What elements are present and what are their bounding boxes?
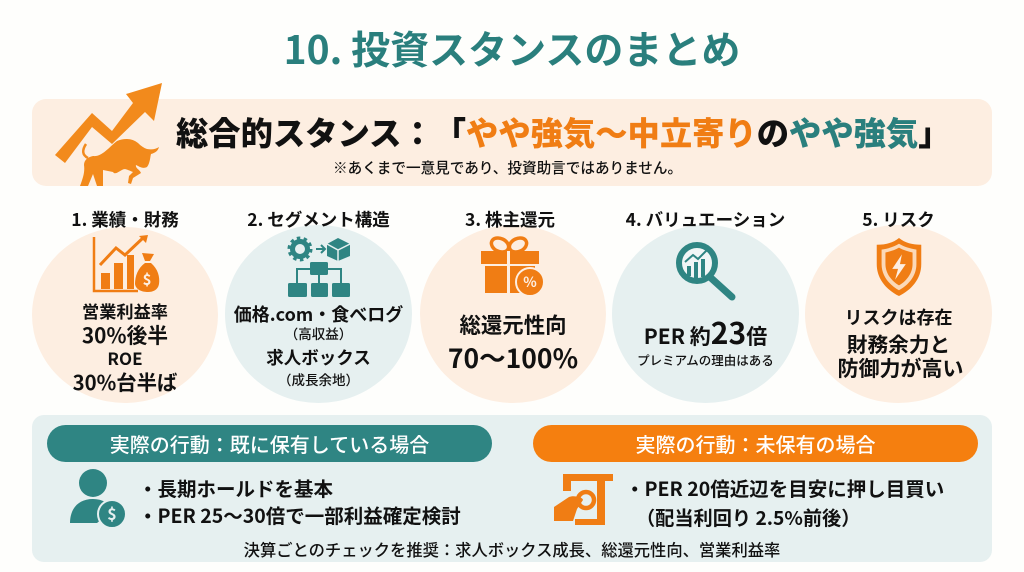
icon: investor with dollar (70, 469, 125, 527)
risk text: リスクは存在 (844, 304, 952, 330)
title: 10. 投資スタンスのまとめ (284, 20, 740, 76)
heading: 3. 株主還元 (465, 207, 555, 232)
action pill: not holding: 実際の行動：未保有の場合 (636, 429, 876, 458)
payout text: 総還元性向 (460, 309, 566, 340)
valuation text: プレミアムの理由はある (637, 350, 774, 369)
panel: 3 shareholder returns (420, 207, 606, 403)
segment text: 求人ボックス (266, 345, 371, 370)
metrics text: 30%後半 (82, 319, 168, 349)
panel: actions (32, 415, 992, 562)
not holding bullet list: （配当利回り 2.5%前後） (636, 503, 860, 531)
payout text (448, 309, 578, 376)
metrics text: 営業利益率 (82, 298, 168, 323)
panel: 5 risk (805, 207, 992, 403)
heading: 5. リスク (862, 207, 935, 232)
footer recommendation: 決算ごとのチェックを推奨：求人ボックス成長、総還元性向、営業利益率 (244, 537, 780, 561)
icon: chart with money bag (92, 235, 160, 292)
holding bullet list (138, 473, 461, 529)
heading: 1. 業績・財務 (71, 207, 179, 232)
risk text (838, 304, 964, 383)
icon: chart with money bag: $ (143, 269, 151, 290)
circle background (805, 225, 992, 403)
overall stance heading: 総合的スタンス：「やや強気〜中立寄りのやや強気」 (176, 109, 951, 155)
icon: gear, box and hierarchy (288, 236, 350, 297)
panel: 4 valuation (612, 207, 799, 403)
payout text: 70～100% (448, 337, 578, 376)
circle background (32, 227, 218, 403)
heading: 2. セグメント構造 (247, 207, 390, 232)
metrics text: ROE (107, 345, 143, 370)
holding bullet list: ・PER 25～30倍で一部利益確定検討 (138, 500, 461, 529)
metrics text (73, 298, 177, 396)
panel: 2 segment structure (225, 207, 412, 403)
icon: gift with percent (481, 236, 543, 295)
icon: hand and banknote (554, 474, 613, 525)
panel: overall stance (32, 99, 992, 186)
icon: shield with bolt (876, 238, 922, 296)
valuation text: PER 約23倍 (644, 309, 767, 353)
not holding bullet list: ・PER 20倍近辺を目安に押し目買い (625, 473, 944, 502)
metrics text: 30%台半ば (73, 366, 177, 396)
circle background (225, 225, 412, 403)
icon: gift with percent: % (523, 272, 537, 292)
icon: magnifier with chart (676, 242, 736, 300)
icon: investor with dollar: $ (107, 501, 117, 525)
action pill: already holding: 実際の行動：既に保有している場合 (110, 429, 429, 458)
segment text: （高収益） (285, 323, 352, 343)
circle background (612, 225, 799, 403)
action pill: not holding (533, 425, 978, 462)
segment text (234, 301, 403, 389)
risk text: 防御力が高い (838, 353, 964, 383)
segment text: 価格.com・食べログ (234, 301, 403, 327)
holding bullet list: ・長期ホールドを基本 (138, 473, 333, 502)
action pill: already holding (47, 425, 492, 462)
segment text: （成長余地） (278, 369, 359, 389)
circle background (420, 225, 606, 403)
heading: 4. バリュエーション (626, 207, 785, 232)
panel: 1 performance and finance (32, 207, 218, 403)
icon: rising arrow and bull (55, 83, 162, 186)
not holding bullet list (625, 473, 944, 531)
valuation text (637, 309, 774, 369)
disclaimer: ※あくまで一意見であり、投資助言ではありません。 (333, 157, 682, 178)
risk text: 財務余力と (847, 328, 950, 358)
